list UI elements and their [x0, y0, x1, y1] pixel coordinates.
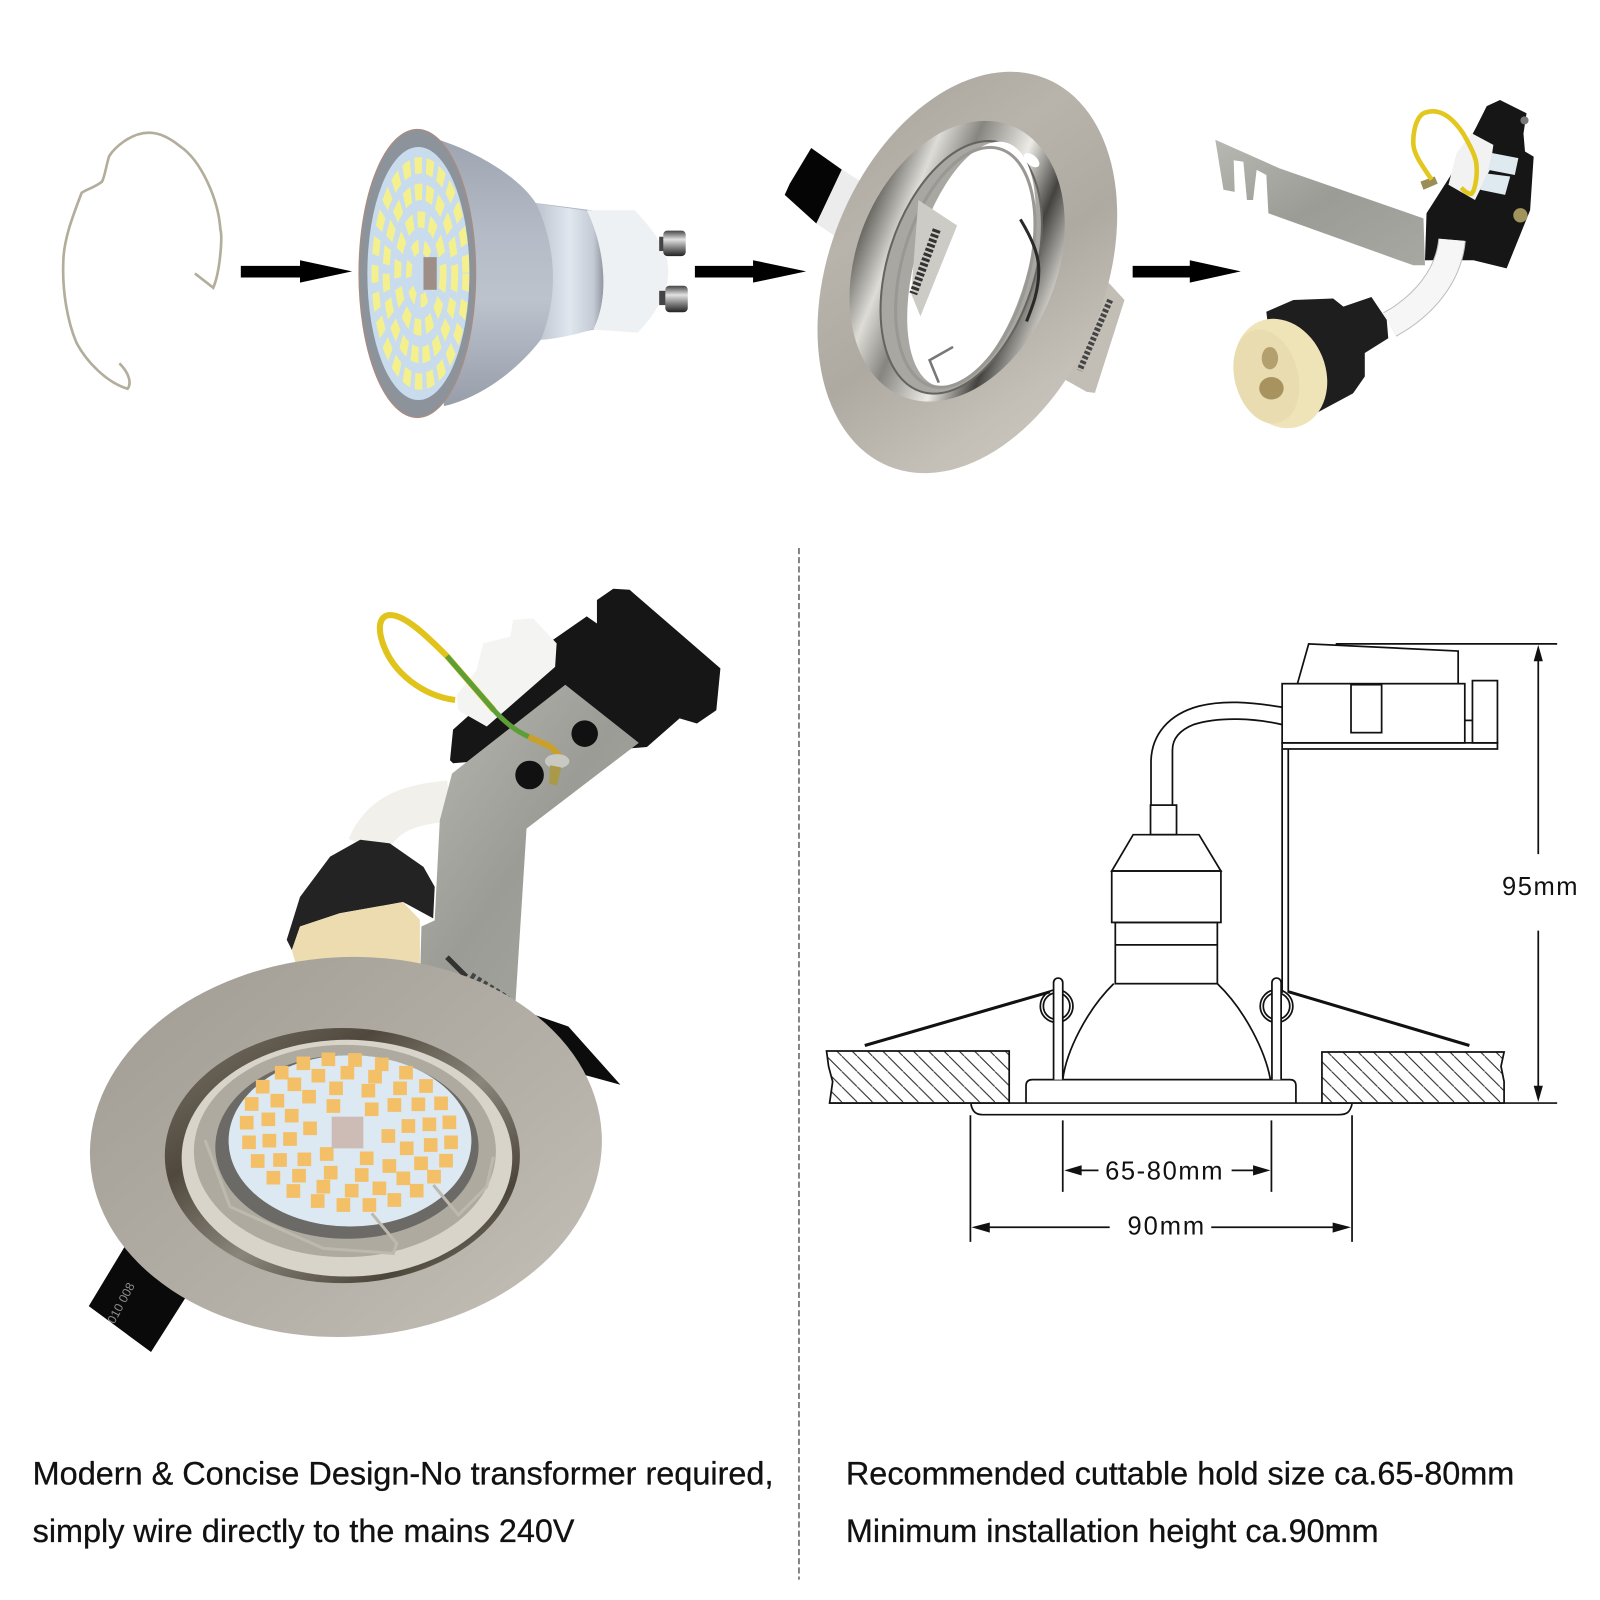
fitting base [1026, 1080, 1296, 1103]
wire clip end [930, 347, 953, 383]
chrome outer ring [165, 1028, 520, 1283]
chrome highlight [1021, 150, 1042, 170]
bright inner band [182, 1040, 512, 1277]
icon: retaining clip ring [63, 133, 221, 389]
white cable [367, 801, 449, 847]
upper socket hole [1262, 347, 1278, 369]
socket ceramic [292, 902, 420, 964]
inner coil rings [851, 120, 1071, 414]
left ceiling section [827, 1051, 1009, 1103]
bracket slot [447, 957, 466, 977]
black spring clip [785, 148, 843, 223]
icon: GU10 lamp holder [1215, 100, 1534, 442]
caption line 2: Minimum installation height ca.90mm [846, 1512, 1379, 1549]
cable drawing [1151, 702, 1282, 805]
earth wire green [447, 656, 529, 737]
caption: left panel [33, 1455, 773, 1549]
right spring arm [1289, 992, 1469, 1046]
bulb LED rings [375, 165, 466, 382]
right spring [1080, 300, 1110, 370]
panel: dimension drawing [827, 644, 1557, 1242]
upper right black clip [515, 1008, 620, 1085]
terminal block drawing [1282, 644, 1497, 749]
65-80mm dimension line [1063, 1120, 1271, 1192]
white terminal [457, 618, 557, 727]
black connector block [1425, 100, 1534, 268]
bulb upper pin [659, 231, 686, 256]
icon: GU10 LED bulb [359, 130, 688, 417]
chrome gimbal ring [810, 88, 1105, 434]
right ceiling section [1322, 1052, 1504, 1103]
flange profile [971, 1104, 1352, 1115]
bulb LED face [367, 147, 469, 400]
clip white stripe [816, 169, 867, 239]
panel: assembled downlight photo [80, 589, 720, 1352]
bulb glass rim [359, 130, 476, 417]
LED disc [229, 1055, 471, 1227]
icon: fixture ring front view [761, 27, 1173, 518]
grey band [194, 1045, 496, 1257]
right metal tab [1061, 276, 1124, 393]
arrow: fitting to holder [1133, 260, 1241, 283]
lamp bezel [215, 1055, 479, 1239]
right spring coil [1260, 978, 1293, 1080]
spring [470, 977, 507, 1000]
black rear block [450, 589, 720, 763]
bulb aluminium dome [439, 140, 594, 406]
bulb ceramic base [587, 210, 668, 333]
lower socket hole [1259, 377, 1284, 399]
label: 95mm: 95mm [1502, 873, 1578, 901]
crown screw [1520, 116, 1529, 124]
left spring arm [865, 992, 1050, 1046]
earth wire yellow [380, 615, 494, 710]
caption: right panel [846, 1455, 1514, 1549]
panel divider [798, 548, 800, 1580]
ceiling line [830, 1102, 1557, 1104]
label: 90mm: 90mm [1128, 1213, 1204, 1241]
bulb neck [536, 203, 604, 340]
caption line 2: simply wire directly to the mains 240V [33, 1512, 575, 1549]
lower left black clip [89, 1242, 192, 1352]
arrow: bulb to fitting [695, 260, 806, 283]
metal bracket [1215, 140, 1425, 265]
caption line 1: Modern & Concise Design-No transformer required, [33, 1455, 773, 1492]
inner wire ring [870, 131, 1060, 403]
centre chip [332, 1117, 363, 1148]
terminal pegs [1480, 153, 1518, 195]
95mm dimension line [1534, 645, 1543, 1102]
bolt [1420, 177, 1438, 190]
bulb centre chip [423, 257, 437, 290]
bracket hole lower [515, 761, 544, 789]
mounting bracket [420, 685, 639, 1005]
socket black body [287, 840, 435, 950]
lamp dome drawing [1063, 984, 1270, 1080]
90mm dimension line [970, 1115, 1352, 1242]
inner tab [911, 200, 957, 316]
top extension line [1336, 643, 1557, 645]
left spring coil [1040, 978, 1073, 1080]
chrome dark streak [1020, 219, 1039, 321]
bracket hole upper [571, 720, 598, 747]
bulb lower pin [659, 286, 688, 312]
white terminal [1448, 133, 1493, 200]
brushed flange [80, 944, 612, 1350]
socket ceramic face [1223, 322, 1309, 431]
clip wire right [433, 1157, 493, 1215]
brass screw [1513, 208, 1528, 222]
clip marking: 010 008 [105, 1280, 138, 1326]
inner spring [913, 230, 937, 294]
support bar [1282, 749, 1288, 993]
caption line 1: Recommended cuttable hold size ca.65-80mm [846, 1455, 1514, 1492]
clip wire left [205, 1140, 397, 1253]
central opening [883, 127, 1060, 401]
socket drawing [1112, 805, 1221, 984]
crimp terminal [529, 737, 563, 760]
brushed flange [761, 27, 1173, 518]
label: 65-80mm: 65-80mm [1105, 1158, 1222, 1186]
warm LED array [205, 1059, 493, 1253]
white cable bundle [1390, 240, 1452, 324]
socket black body [1266, 297, 1388, 415]
bracket bolt [545, 754, 569, 786]
socket ceramic body [1218, 305, 1343, 442]
earth wire loop [1413, 111, 1477, 194]
arrow: clip to bulb [241, 260, 352, 283]
